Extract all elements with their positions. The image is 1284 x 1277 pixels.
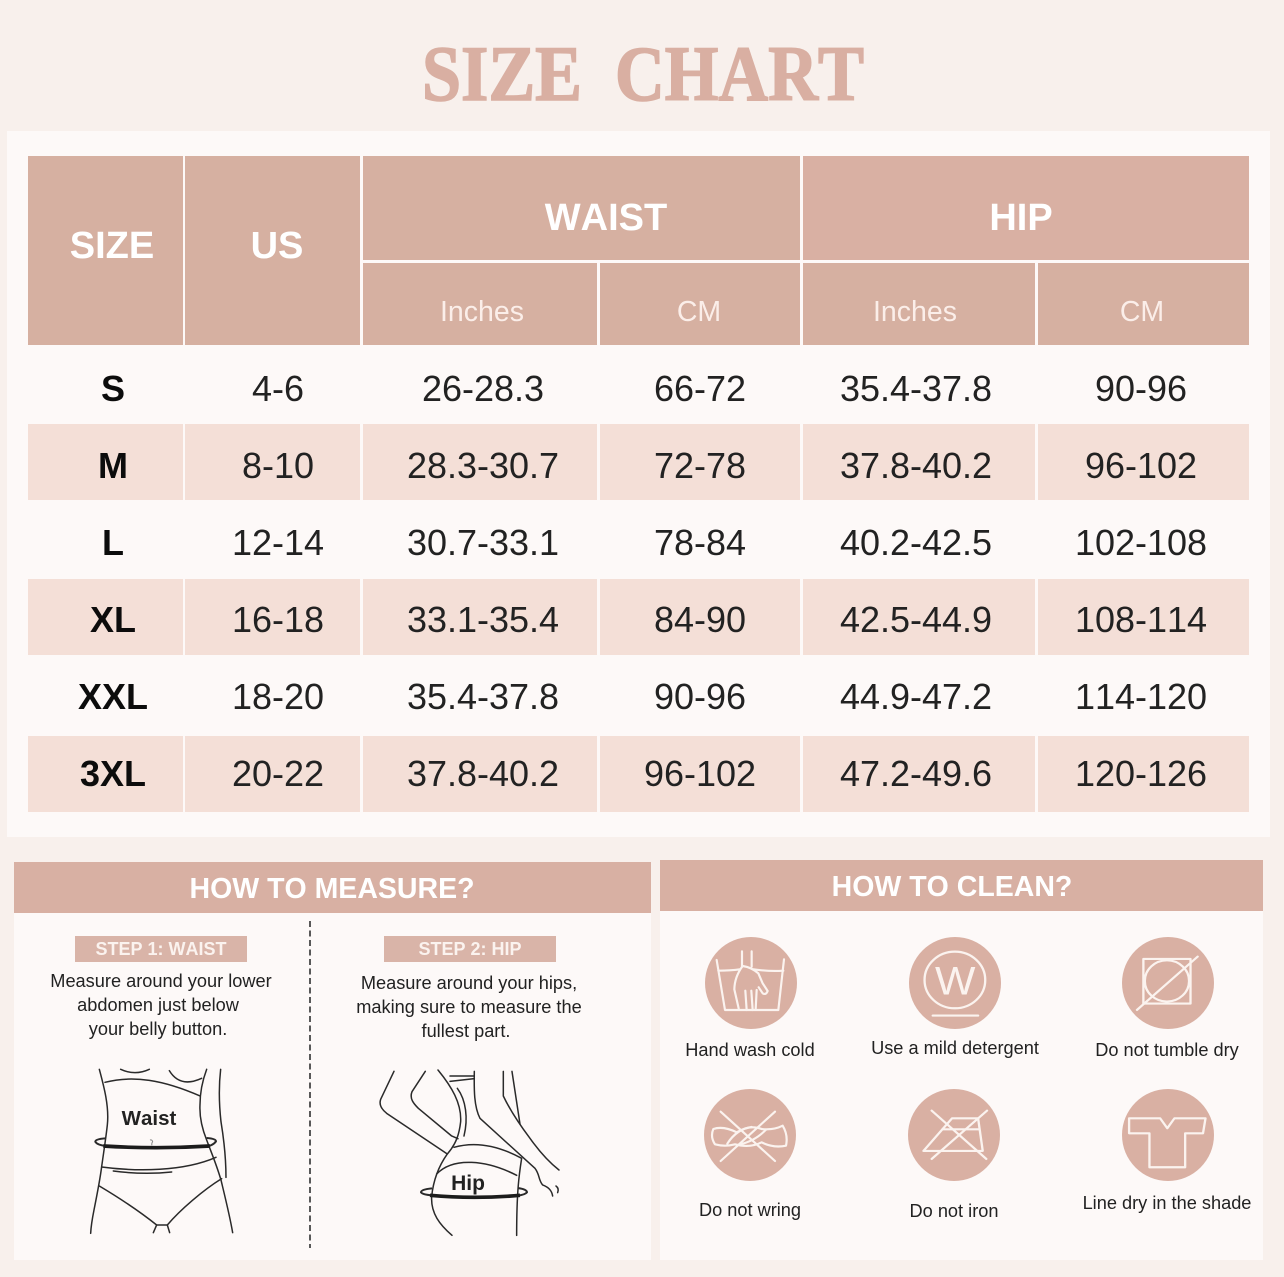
- panel: how to measure: [14, 862, 651, 1260]
- step 2 label: [384, 936, 556, 962]
- table header: CM: [1120, 296, 1164, 328]
- table header: Inches: [873, 296, 957, 328]
- step 2 text: making sure to measure the: [356, 997, 582, 1017]
- icon: do not wring: [704, 1089, 796, 1181]
- row: XXL: [78, 676, 1207, 717]
- row: L: 78-84: [654, 522, 746, 563]
- row: XXL: 35.4-37.8: [407, 676, 559, 717]
- row: XL: 16-18: [232, 599, 324, 640]
- row: 3XL: [80, 753, 1207, 794]
- panel: how to clean: [660, 860, 1263, 1260]
- row: XL: 108-114: [1075, 599, 1207, 640]
- row: L: 30.7-33.1: [407, 522, 559, 563]
- row: S: 4-6: [252, 368, 304, 409]
- caption: hand wash cold: Hand wash cold: [685, 1040, 815, 1060]
- row: XXL: XXL: [78, 676, 148, 717]
- row: S: S: [101, 368, 125, 409]
- caption: do not tumble dry: Do not tumble dry: [1095, 1040, 1240, 1060]
- icon: do not iron: [908, 1089, 1000, 1181]
- row: XL: 33.1-35.4: [407, 599, 559, 640]
- table header: Inches: [440, 296, 524, 328]
- step 1 text: Measure around your lower: [50, 971, 272, 991]
- row: 3XL: 37.8-40.2: [407, 753, 559, 794]
- table header: WAIST: [545, 197, 667, 239]
- row: 3XL: 47.2-49.6: [840, 753, 992, 794]
- table header: US: [251, 225, 303, 267]
- heading: how to measure: HOW TO MEASURE?: [190, 873, 474, 905]
- row: S: 26-28.3: [422, 368, 544, 409]
- row: S: 90-96: [1095, 368, 1187, 409]
- panel: size table: [7, 131, 1270, 837]
- step 1 label: [75, 936, 247, 962]
- illustration: hip: [380, 1070, 559, 1235]
- table header: [28, 156, 1249, 345]
- icon: mild detergent: W: [935, 959, 975, 1003]
- row: XXL: 114-120: [1075, 676, 1207, 717]
- row: M: 28.3-30.7: [407, 445, 559, 486]
- row: 3XL: 3XL: [80, 753, 146, 794]
- step 2 text: [356, 973, 582, 1041]
- table header: SIZE: [70, 225, 154, 267]
- row: L: [102, 522, 1207, 563]
- step 1 label: STEP 1: WAIST: [95, 939, 227, 959]
- caption: line dry in the shade: Line dry in the shade: [1083, 1193, 1251, 1213]
- row: XL: [90, 599, 1207, 640]
- row: S: 35.4-37.8: [840, 368, 992, 409]
- table header: CM: [677, 296, 721, 328]
- row: M: 37.8-40.2: [840, 445, 992, 486]
- table header: HIP: [989, 197, 1053, 239]
- step 2 label: STEP 2: HIP: [418, 939, 522, 959]
- row: S: 66-72: [654, 368, 746, 409]
- step 1 text: your belly button.: [89, 1019, 227, 1039]
- row backgrounds: [28, 424, 1249, 812]
- caption: do not iron: Do not iron: [910, 1201, 998, 1221]
- row: M: 8-10: [242, 445, 314, 486]
- row: XL: 42.5-44.9: [840, 599, 992, 640]
- row: 3XL: 20-22: [232, 753, 324, 794]
- row: L: L: [102, 522, 124, 563]
- heading: how to clean: [660, 860, 1263, 911]
- icon: hand wash cold: [705, 937, 797, 1029]
- illustration: waist: [91, 1069, 233, 1233]
- row: M: [98, 445, 1197, 486]
- heading: how to clean: HOW TO CLEAN?: [832, 871, 1072, 903]
- title: SIZE: [422, 30, 582, 117]
- row: XL: XL: [90, 599, 136, 640]
- row: L: 40.2-42.5: [840, 522, 992, 563]
- row: XL: 84-90: [654, 599, 746, 640]
- row: L: 12-14: [232, 522, 324, 563]
- row: S: [101, 368, 1187, 409]
- row: XXL: 18-20: [232, 676, 324, 717]
- row: M: 72-78: [654, 445, 746, 486]
- row: XXL: 90-96: [654, 676, 746, 717]
- row: 3XL: 120-126: [1075, 753, 1207, 794]
- row: L: 102-108: [1075, 522, 1207, 563]
- divider: [309, 921, 311, 1248]
- step 2 text: fullest part.: [422, 1021, 510, 1041]
- label: waist: Waist: [122, 1107, 177, 1130]
- icon: line dry in the shade: [1122, 1089, 1214, 1181]
- label: hip: Hip: [451, 1172, 485, 1195]
- icon: do not tumble dry: [1122, 937, 1214, 1029]
- row: 3XL: 96-102: [644, 753, 756, 794]
- title: CHART: [615, 30, 864, 117]
- heading: how to measure: [14, 862, 651, 913]
- step 1 text: abdomen just below: [77, 995, 240, 1015]
- title: [422, 30, 864, 117]
- row: XXL: 44.9-47.2: [840, 676, 992, 717]
- caption: mild detergent: Use a mild detergent: [871, 1038, 1039, 1058]
- icon: mild detergent: [909, 937, 1001, 1029]
- step 2 text: Measure around your hips,: [361, 973, 577, 993]
- step 1 text: [50, 971, 272, 1039]
- row: M: M: [98, 445, 128, 486]
- row: M: 96-102: [1085, 445, 1197, 486]
- caption: do not wring: Do not wring: [699, 1200, 801, 1220]
